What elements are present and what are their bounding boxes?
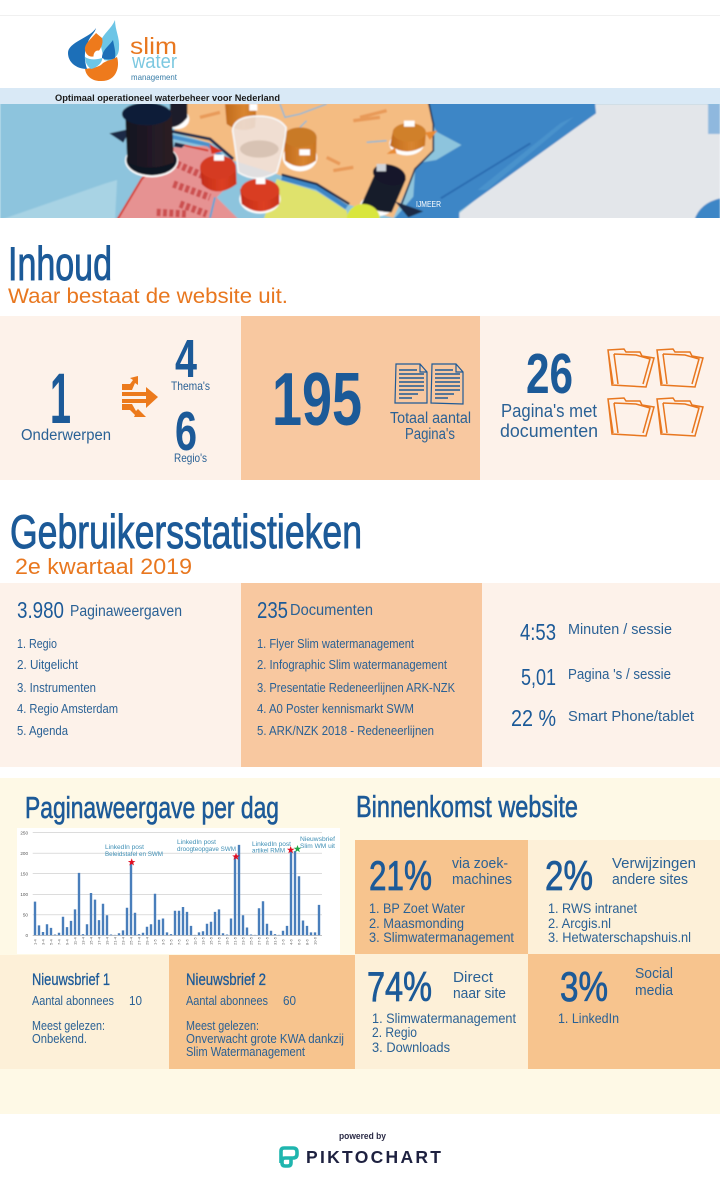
icon: two documents <box>395 364 463 404</box>
list: top documents: 1. Flyer Slim watermanagement <box>257 637 414 651</box>
list: top pages: 4. Regio Amsterdam <box>17 702 118 716</box>
newsletter 2 subscriber count: 60 <box>283 994 296 1008</box>
tagline text: Optimaal operationeel waterbeheer voor Nederland <box>55 93 280 104</box>
chart x axis labels: 7-5 <box>176 938 182 945</box>
logo word: management: management <box>131 72 178 82</box>
label: referrals: andere sites <box>612 871 688 888</box>
chart x axis labels: 27-4 <box>136 936 142 945</box>
chart y axis labels: 200 <box>20 851 28 856</box>
list: direct pages <box>372 1010 516 1055</box>
chart annotations: Nieuwsbrief <box>300 836 335 843</box>
logo word: water: water <box>131 51 177 73</box>
list: top documents: 4. A0 Poster kennismarkt SWM <box>257 702 414 716</box>
list: top pages: 3. Instrumenten <box>17 681 96 695</box>
stat: 21%: 21% <box>369 852 432 899</box>
label: Pagina's met: Pagina's met <box>501 401 597 421</box>
icon: orange arrows <box>122 376 158 417</box>
list: direct pages: 1. Slimwatermanagement <box>372 1010 516 1026</box>
list: direct pages: 2. Regio <box>372 1024 417 1040</box>
label: Documenten: Documenten <box>290 602 373 619</box>
list: search landing pages: 1. BP Zoet Water <box>369 900 465 916</box>
newsletter 2 most read line 2: Slim Watermanagement <box>186 1045 305 1059</box>
chart x axis labels: 31-5 <box>272 936 278 945</box>
chart annotations: LinkedIn post <box>252 841 291 848</box>
chart x axis labels: 15-5 <box>208 936 214 945</box>
chart x axis labels: 1-4 <box>32 938 38 945</box>
chart x axis labels: 2-6 <box>280 938 286 945</box>
text: powered by: powered by <box>339 1131 386 1141</box>
stat: 235: 235 <box>257 597 288 623</box>
label: via search engines: via zoek- <box>452 855 508 872</box>
chart y axis labels: 250 <box>20 830 28 836</box>
map label: IJMEER <box>416 200 441 209</box>
label: minutes per session: Minuten / sessie <box>568 622 672 638</box>
panel: pages with documents <box>480 316 720 480</box>
list: referring sites: 3. Hetwaterschapshuis.nl <box>548 929 691 945</box>
chart x axis labels: 4-6 <box>288 938 294 945</box>
icon: Piktochart mark <box>281 1148 297 1166</box>
chart x axis labels: 29-4 <box>144 936 150 945</box>
text: PIKTOCHART: PIKTOCHART <box>306 1147 441 1167</box>
chart x axis labels: 17-5 <box>216 936 222 945</box>
chart annotations: Slim WM uit <box>300 843 335 850</box>
newsletter 1 title: Nieuwsbrief 1 <box>32 970 110 989</box>
board close-up <box>109 104 438 218</box>
list: top documents: 3. Presentatie Redeneerlijnen ARK-NZK <box>257 681 456 695</box>
stat: 26: 26 <box>526 342 573 406</box>
list: top pages: 1. Regio <box>17 637 57 651</box>
chart x axis labels: 1-5 <box>152 938 158 945</box>
chart x axis labels: 17-4 <box>96 936 102 945</box>
label: via search engines <box>452 855 512 888</box>
stat: 6: 6 <box>175 400 197 462</box>
panel: documents <box>241 583 482 767</box>
label: direct <box>453 969 506 1002</box>
label: Pagina's: Pagina's <box>405 426 455 443</box>
label: total pages: Totaal aantal <box>390 410 471 427</box>
chart x axis labels: 7-4 <box>56 938 62 945</box>
chart x axis labels: 9-5 <box>184 938 190 945</box>
panel: cream background section <box>0 778 720 1114</box>
chart x axis labels: 15-4 <box>88 936 94 945</box>
chart y axis labels: 100 <box>20 892 28 897</box>
heading: Paginaweergave per dag: Paginaweergave per dag <box>25 790 279 825</box>
chart annotations: Beleidstafel en SWM <box>105 851 163 858</box>
newsletter 2 most read: Meest gelezen: <box>186 1019 259 1033</box>
list: top documents <box>257 637 456 738</box>
panel: page views <box>0 583 241 767</box>
panel: total pages <box>241 316 480 480</box>
heading: Gebruikersstatistieken: Gebruikersstatistieken <box>10 505 362 558</box>
list: search landing pages <box>369 900 514 945</box>
newsletter 1 most read: Meest gelezen: <box>32 1019 105 1033</box>
stat: 4: 4 <box>175 329 197 389</box>
chart y axis labels <box>20 830 28 938</box>
chart x axis labels: 11-5 <box>192 937 198 945</box>
label: social media: Social <box>635 965 673 982</box>
label: Onderwerpen: Onderwerpen <box>21 427 111 444</box>
panel: session statistics <box>482 583 720 767</box>
list: top pages: 5. Agenda <box>17 724 68 738</box>
label: direct: Direct <box>453 969 494 986</box>
icon: water drops <box>68 20 119 81</box>
label: direct: naar site <box>453 985 506 1002</box>
chart x axis labels: 3-5 <box>160 938 166 945</box>
chart x axis labels: 21-4 <box>112 936 118 945</box>
chart x axis labels: 19-4 <box>104 936 110 945</box>
panel: direct traffic <box>355 954 528 1069</box>
chart x axis labels: 27-5 <box>256 936 262 945</box>
chart x axis labels: 29-5 <box>264 936 270 945</box>
list: top pages <box>17 637 118 738</box>
list: top pages: 2. Uitgelicht <box>17 658 78 672</box>
newsletter 1 subscriber count: 10 <box>129 994 142 1008</box>
list: top documents: 2. Infographic Slim watermanagement <box>257 658 447 672</box>
newsletter 2 title: Nieuwsbrief 2 <box>186 970 266 989</box>
stat: smart phone share: 22 % <box>511 705 556 731</box>
newsletter 2 subscribers: Aantal abonnees <box>186 994 268 1008</box>
label: smart phone share: Smart Phone/tablet <box>568 709 694 725</box>
panel: newsletter 1 <box>0 955 169 1069</box>
logo: slim water management <box>68 20 178 82</box>
list: search landing pages: 2. Maasmonding <box>369 915 464 931</box>
list: referring sites <box>548 900 691 945</box>
label: via search engines: machines <box>452 871 512 888</box>
chart x axis labels: 13-5 <box>200 936 206 945</box>
chart x axis labels: 6-6 <box>296 938 302 945</box>
chart x axis labels: 5-4 <box>48 938 54 945</box>
chart annotations: LinkedIn post <box>105 844 144 851</box>
chart x axis labels: 3-4 <box>40 938 46 945</box>
heading: Inhoud: Inhoud <box>8 237 112 290</box>
list: referring sites: 2. Arcgis.nl <box>548 915 611 931</box>
stat: minutes per session: 4:53 <box>520 619 556 645</box>
subheading: quarter: 2e kwartaal 2019 <box>15 554 192 579</box>
panel: search engines <box>355 840 528 954</box>
photo: water game board map with cups <box>0 104 720 218</box>
chart y axis labels: 150 <box>20 872 28 876</box>
chart x axis labels: 11-4 <box>72 937 78 945</box>
label: Paginaweergaven: Paginaweergaven <box>70 603 182 620</box>
logo word: slim: slim <box>130 33 177 59</box>
bar chart: page views per day <box>17 828 340 954</box>
chart y axis labels: 0 <box>25 933 28 938</box>
chart x axis labels: 10-6 <box>312 936 318 945</box>
stat: 3%: 3% <box>560 963 608 1010</box>
panel: topics and themes <box>0 316 241 480</box>
heading: Binnenkomst website: Binnenkomst website <box>356 789 578 824</box>
label: social media <box>635 965 674 999</box>
footer: powered by Piktochart <box>281 1131 441 1167</box>
chart y axis labels: 50 <box>23 912 28 918</box>
chart annotations <box>105 836 335 858</box>
chart annotations: droogteopgave SWM <box>177 846 236 853</box>
chart x axis labels <box>32 936 318 945</box>
list: search landing pages: 3. Slimwatermanagement <box>369 929 514 945</box>
stat: pages per session: 5,01 <box>521 664 556 690</box>
label: referrals <box>612 855 696 888</box>
label: pages per session: Pagina 's / sessie <box>568 667 671 683</box>
stat: 74%: 74% <box>367 963 432 1010</box>
label: Regio's: Regio's <box>174 451 207 465</box>
label: Thema's: Thema's <box>171 379 210 393</box>
chart x axis labels: 19-5 <box>224 936 230 945</box>
chart annotations: artikel RMM <box>252 848 285 854</box>
panel: referrals <box>528 840 720 954</box>
annotation stars <box>128 845 301 866</box>
chart x axis labels: 13-4 <box>80 936 86 945</box>
list: top documents: 5. ARK/NZK 2018 - Redeneerlijnen <box>257 724 434 738</box>
chart x axis labels: 25-4 <box>128 936 134 945</box>
stat: 195: 195 <box>272 357 362 441</box>
chart x axis labels: 5-5 <box>168 938 174 945</box>
subheading: website contents: Waar bestaat de website uit. <box>8 285 288 308</box>
chart x axis labels: 25-5 <box>248 936 254 945</box>
list: direct pages: 3. Downloads <box>372 1039 450 1055</box>
chart x axis labels: 9-4 <box>64 938 70 945</box>
icon: four folders <box>608 349 703 436</box>
newsletter 1 subscribers: Aantal abonnees <box>32 994 114 1008</box>
stat: 3.980: 3.980 <box>17 597 64 623</box>
label: social media: media <box>635 982 674 999</box>
label: documenten: documenten <box>500 421 598 441</box>
chart x axis labels: 23-5 <box>240 936 246 945</box>
list: referring sites: 1. RWS intranet <box>548 900 637 916</box>
newsletter 1 most read value: Onbekend. <box>32 1032 87 1046</box>
chart x axis labels: 21-5 <box>232 936 238 945</box>
list: social networks: 1. LinkedIn <box>558 1010 619 1026</box>
newsletter 2 most read line 1: Onverwacht grote KWA dankzij <box>186 1032 344 1046</box>
chart x axis labels: 23-4 <box>120 936 126 945</box>
tagline band <box>0 88 720 104</box>
panel: newsletter 2 <box>169 955 355 1069</box>
chart annotations: LinkedIn post <box>177 839 216 846</box>
stat: 1: 1 <box>50 360 71 439</box>
panel: social media <box>528 954 720 1069</box>
label: referrals: Verwijzingen <box>612 855 696 872</box>
chart x axis labels: 8-6 <box>304 938 310 945</box>
stat: 2%: 2% <box>545 852 593 899</box>
